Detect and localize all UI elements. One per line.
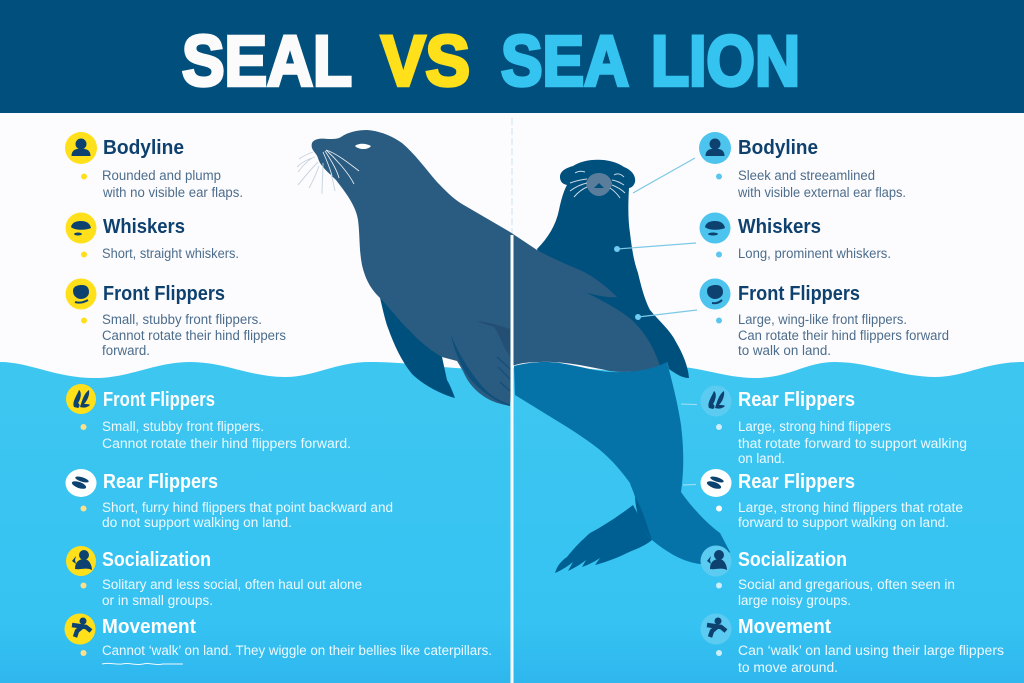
item: whiskers: Whiskers [103, 216, 185, 238]
illustration: sea lion [537, 160, 689, 400]
item: rear flippers two: Rear Flippers [738, 471, 855, 493]
item: front flippers: Cannot rotate their hind flippers [102, 328, 286, 343]
item: rear flippers one: on land. [738, 451, 785, 466]
item: movement: Can ‘walk’ on land using their large flippers [738, 643, 1004, 658]
item: movement: Movement [738, 616, 831, 638]
title: SEA [501, 22, 629, 102]
item: movement: Cannot ‘walk’ on land. They wiggle on their bellies like caterpillars. [102, 643, 492, 658]
water background [0, 362, 1024, 683]
item: socialization [700, 546, 955, 608]
item: movement: to move around. [738, 660, 838, 675]
item: socialization: Social and gregarious, often seen in [738, 577, 955, 592]
item: whiskers [66, 212, 239, 261]
item: front flippers underwater: Cannot rotate their hind flippers forward. [102, 436, 351, 451]
item: bodyline: Sleek and streeamlined [738, 168, 875, 183]
panel: sea lion above water [699, 132, 949, 358]
item: whiskers: Long, prominent whiskers. [738, 246, 891, 261]
item: socialization: Solitary and less social, often haul out alone [102, 577, 362, 592]
item: bodyline: Bodyline [103, 137, 184, 159]
item: rear flippers: Short, furry hind flippers that point backward and [102, 500, 393, 515]
item: front flippers: Can rotate their hind flippers forward [738, 328, 949, 343]
item: whiskers: Whiskers [738, 216, 821, 238]
centre divider, solid [510, 235, 514, 683]
item: bodyline [65, 132, 243, 200]
panel: seal above water [65, 132, 286, 358]
item: movement [64, 614, 492, 665]
illustration: seal body [297, 130, 660, 406]
item: rear flippers one: Large, strong hind flippers [738, 419, 891, 434]
item: front flippers underwater [66, 384, 351, 451]
item: front flippers underwater: Small, stubby front flippers. [102, 419, 264, 434]
item: socialization: Socialization [738, 549, 847, 571]
item: bodyline: Bodyline [738, 137, 818, 159]
title: VS [381, 22, 470, 102]
item: front flippers [66, 278, 286, 358]
item: movement: Movement [102, 616, 196, 638]
item: socialization: large noisy groups. [738, 593, 851, 608]
item: rear flippers two [700, 469, 963, 530]
item: whiskers: Short, straight whiskers. [102, 246, 239, 261]
title: LION [651, 22, 800, 102]
item: socialization: or in small groups. [102, 593, 213, 608]
panel: sea lion below water [700, 386, 1004, 675]
item: rear flippers one: that rotate forward to support walking [738, 436, 967, 451]
callout lines [614, 158, 697, 485]
item: socialization [66, 546, 362, 608]
item: bodyline: Rounded and plump [102, 168, 221, 183]
item: front flippers: Front Flippers [103, 283, 225, 305]
title [182, 22, 800, 102]
item: whiskers [700, 212, 891, 261]
illustration: sea lion underwater body [514, 362, 730, 566]
centre divider, dashed above [511, 118, 513, 236]
item: rear flippers: Rear Flippers [103, 471, 218, 493]
item: front flippers: Front Flippers [738, 283, 860, 305]
item: front flippers [700, 278, 949, 358]
illustration: sea lion tail flipper [555, 505, 652, 573]
item: front flippers: Large, wing-like front flippers. [738, 312, 907, 327]
item: bodyline [699, 132, 906, 200]
item: rear flippers: do not support walking on land. [102, 515, 292, 530]
item: movement [700, 614, 1004, 675]
title: SEAL [182, 22, 352, 102]
item: socialization: Socialization [102, 549, 211, 571]
header band [0, 0, 1024, 113]
item: front flippers underwater: Front Flippers [103, 389, 215, 411]
item: rear flippers one: Rear Flippers [738, 389, 855, 411]
item: rear flippers one [700, 386, 967, 466]
item: front flippers: to walk on land. [738, 343, 831, 358]
panel: seal below water [64, 384, 492, 665]
item: rear flippers [66, 469, 393, 530]
item: rear flippers two: forward to support walking on land. [738, 515, 949, 530]
illustration: seal rear flipper [380, 298, 455, 398]
sea lion face [570, 171, 625, 198]
item: front flippers: Small, stubby front flippers. [102, 312, 262, 327]
item: bodyline: with no visible ear flaps. [102, 185, 243, 200]
item: rear flippers two: Large, strong hind flippers that rotate [738, 500, 963, 515]
item: front flippers: forward. [102, 343, 150, 358]
item: bodyline: with visible external ear flaps. [737, 185, 906, 200]
